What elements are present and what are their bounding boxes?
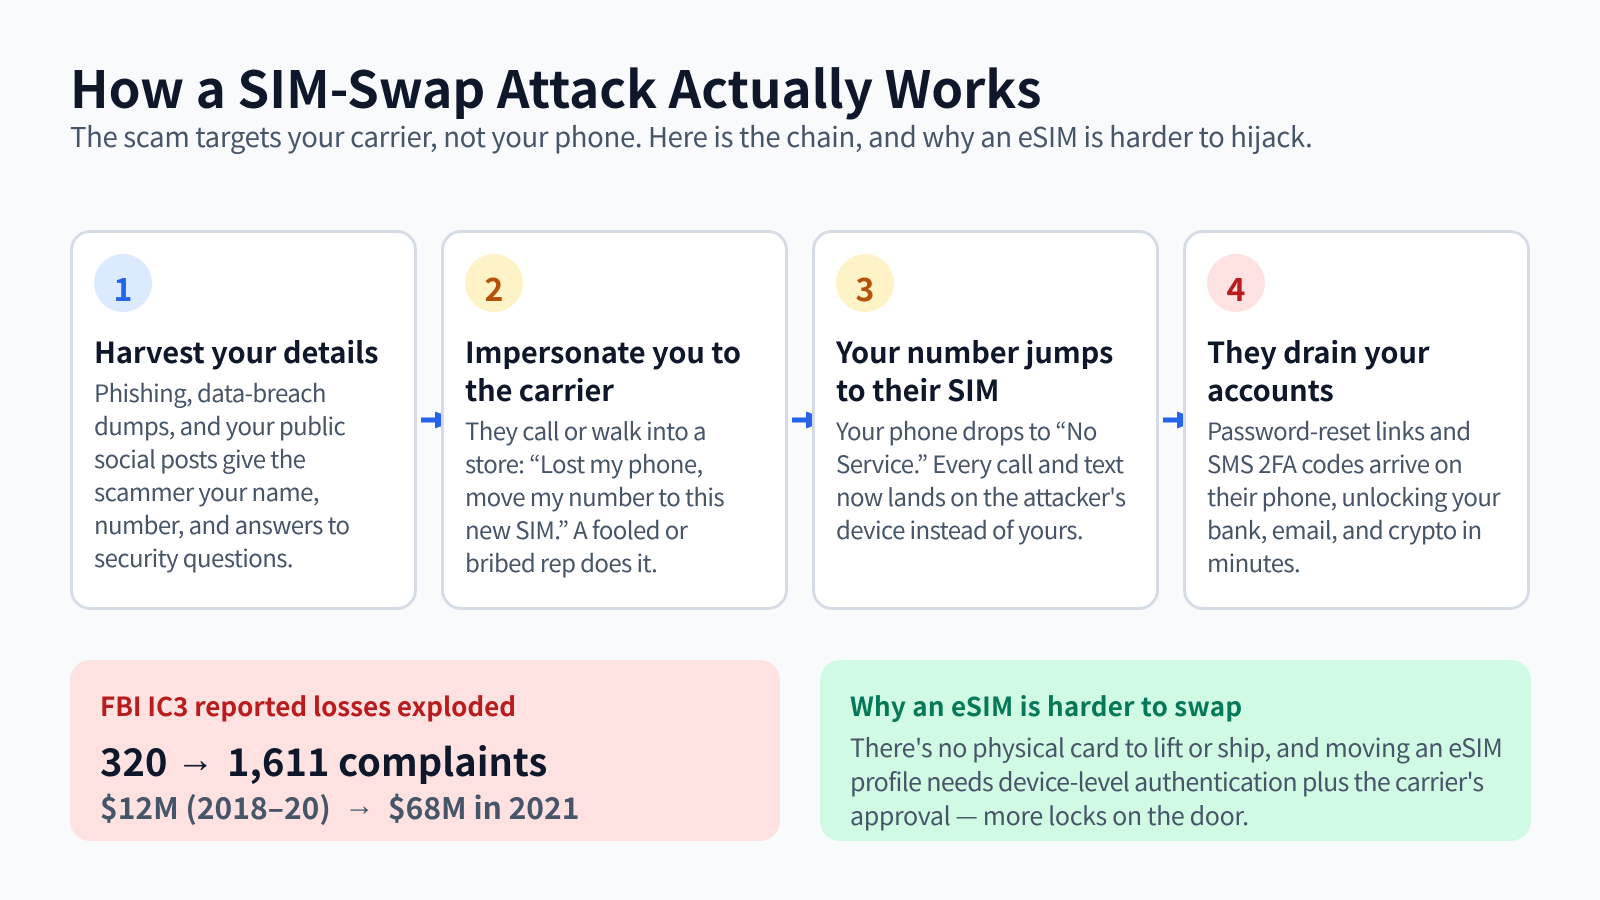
panel: step 1: [70, 230, 417, 610]
step 1 text: scammer your name,: [94, 473, 319, 508]
step 2 heading: Impersonate you to: [465, 330, 741, 372]
eSIM text: approval — more locks on the door.: [850, 797, 1249, 833]
step 3 number: [836, 254, 894, 312]
arrow: step 3 to 4: [1163, 412, 1183, 428]
step 1 text: security questions.: [94, 539, 293, 574]
step 3 text: Your phone drops to “No: [836, 412, 1097, 447]
dollar losses: $12M (2018–20) → $68M in 2021: [100, 784, 579, 828]
step 1 text: Phishing, data-breach: [94, 374, 326, 409]
step 2 text: bribed rep does it.: [465, 544, 657, 579]
step 3 heading: [836, 330, 1113, 410]
arrow: step 2 to 3: [792, 412, 812, 428]
title: How a SIM-Swap Attack Actually Works: [70, 49, 1041, 123]
panel: step 4: [1183, 230, 1530, 610]
step 4 heading: They drain your: [1207, 330, 1429, 372]
subtitle: The scam targets your carrier, not your phone. Here is the chain, and why an eSIM is harder to hijack.: [70, 115, 1313, 155]
step 4 heading: [1207, 330, 1430, 410]
panel: why eSIM: [820, 660, 1531, 841]
losses heading: FBI IC3 reported losses exploded: [100, 687, 516, 724]
step 1 text: social posts give the: [94, 440, 305, 475]
eSIM text: profile needs device-level authentication plus the carrier's: [850, 763, 1483, 799]
step 2 heading: [465, 330, 741, 410]
eSIM text: [850, 729, 1502, 833]
step 3 heading: Your number jumps: [836, 330, 1113, 372]
panel: FBI losses: [70, 660, 780, 841]
eSIM text: There's no physical card to lift or ship, and moving an eSIM: [850, 729, 1502, 765]
step 1 heading: Harvest your details: [94, 330, 378, 372]
step 4 text: Password-reset links and: [1207, 412, 1471, 447]
step 3 number: 3: [856, 265, 874, 311]
step 1 number: 1: [114, 265, 132, 311]
eSIM heading: Why an eSIM is harder to swap: [850, 687, 1242, 724]
step 1 text: number, and answers to: [94, 506, 350, 541]
arrow: step 1 to 2: [421, 412, 441, 428]
step 4 text: bank, email, and crypto in: [1207, 511, 1482, 546]
step 2 text: store: “Lost my phone,: [465, 445, 703, 480]
step 2 text: new SIM.” A fooled or: [465, 511, 687, 546]
panel: step 2: [441, 230, 788, 610]
step 1 text: dumps, and your public: [94, 407, 345, 442]
step 3 heading: to their SIM: [836, 368, 999, 410]
step 4 text: SMS 2FA codes arrive on: [1207, 445, 1462, 480]
step 3 text: now lands on the attacker's: [836, 478, 1125, 513]
step 1 number: [94, 254, 152, 312]
step 3 text: [836, 412, 1126, 546]
complaints figure: 320 → 1,611 complaints: [100, 732, 547, 787]
step 4 number: 4: [1227, 265, 1245, 311]
step 2 number: 2: [485, 265, 503, 311]
step 3 text: device instead of yours.: [836, 511, 1083, 546]
step 2 text: [465, 412, 724, 579]
panel: step 3: [812, 230, 1159, 610]
step 4 heading: accounts: [1207, 368, 1334, 410]
step 4 text: their phone, unlocking your: [1207, 478, 1500, 513]
step 2 number: [465, 254, 523, 312]
step 4 text: [1207, 412, 1501, 579]
step 4 text: minutes.: [1207, 544, 1300, 579]
step 2 text: move my number to this: [465, 478, 724, 513]
step 2 heading: the carrier: [465, 368, 614, 410]
step 3 text: Service.” Every call and text: [836, 445, 1123, 480]
step 4 number: [1207, 254, 1265, 312]
step 2 text: They call or walk into a: [465, 412, 706, 447]
step 1 text: [94, 374, 350, 574]
